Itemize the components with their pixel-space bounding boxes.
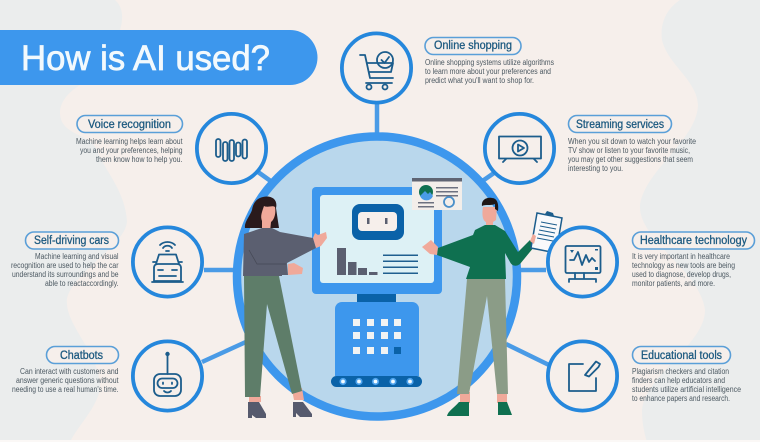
- description: interesting to you.: [568, 164, 623, 173]
- robot base: [331, 376, 422, 387]
- title banner: [0, 30, 318, 85]
- icon: heart-rate monitor: [548, 227, 617, 297]
- item: Self-driving cars: [11, 227, 202, 297]
- description: monitor patients, and more.: [632, 279, 715, 288]
- man face: [482, 207, 497, 228]
- description: [632, 367, 741, 403]
- man jersey: [437, 225, 534, 279]
- robot body: [335, 302, 419, 376]
- description: [632, 252, 735, 288]
- clipboard: [531, 211, 562, 253]
- woman hands: [288, 232, 327, 275]
- floating dashboard card: [412, 178, 462, 210]
- heading: Healthcare technology: [640, 235, 747, 247]
- description: you and your preferences, helping: [80, 146, 182, 155]
- description: Online shopping systems utilize algorithms: [425, 58, 554, 67]
- heading: [568, 116, 672, 132]
- man hand: [422, 240, 438, 255]
- icon: note with pencil: [548, 341, 617, 411]
- description: [76, 137, 183, 164]
- monitor text lines: [383, 254, 418, 274]
- woman hair: [245, 197, 279, 228]
- robot neck: [357, 292, 396, 304]
- icon: shopping cart: [342, 33, 411, 103]
- woman face and neck: [261, 206, 275, 232]
- man shoes: [447, 402, 512, 416]
- description: [568, 137, 696, 173]
- icon: robot head: [133, 341, 202, 411]
- description: Plagiarism checkers and citation: [632, 367, 729, 376]
- heading: [46, 346, 118, 364]
- woman figure: [243, 197, 327, 418]
- heading: [632, 346, 730, 364]
- description: understand its surroundings and be: [12, 270, 118, 279]
- description: needing to use a real human's time.: [12, 385, 118, 394]
- woman sweater: [243, 228, 316, 276]
- title banner: How is AI used?: [21, 39, 270, 78]
- heading: Voice recognition: [88, 119, 171, 131]
- description: to learn more about your preferences and: [425, 67, 551, 76]
- description: recognition are used to help the car: [11, 261, 119, 270]
- woman boots: [248, 402, 312, 418]
- man legs: [457, 279, 508, 403]
- central circle: [237, 136, 517, 416]
- description: [425, 58, 554, 85]
- item: Voice recognition: [76, 114, 266, 183]
- description: Machine learning helps learn about: [76, 137, 183, 146]
- robot computer: [312, 187, 442, 387]
- item: Chatbots: [12, 341, 202, 411]
- heading: [77, 116, 182, 132]
- item: Streaming services: [485, 114, 696, 183]
- heading: Chatbots: [60, 350, 103, 362]
- monitor bar chart: [337, 248, 378, 275]
- man hand on clipboard: [530, 234, 536, 244]
- description: answer generic questions without: [16, 376, 119, 385]
- robot face: [352, 204, 404, 240]
- description: Machine learning and visual: [35, 252, 119, 261]
- description: finders can help educators and: [632, 376, 725, 385]
- description: them know how to help you.: [96, 155, 182, 164]
- description: predict what you'll want to shop for.: [425, 76, 534, 85]
- icon: TV with play button: [485, 114, 554, 183]
- description: Can interact with customers and: [20, 367, 118, 376]
- woman sleeve fold: [249, 250, 286, 264]
- heading: Educational tools: [641, 350, 722, 362]
- description: you may get other suggestions that seem: [568, 155, 693, 164]
- monitor: [312, 187, 442, 294]
- heading: Streaming services: [576, 119, 664, 131]
- item: Healthcare technology: [548, 227, 754, 297]
- description: technology as new tools are being: [632, 261, 735, 270]
- heading: Online shopping: [434, 40, 512, 52]
- item: Online shopping: [342, 33, 554, 103]
- description: students utilize artificial intelligence: [632, 385, 741, 394]
- heading: Self-driving cars: [34, 235, 109, 247]
- icon: sound wave: [197, 114, 266, 183]
- description: [12, 367, 119, 394]
- description: When you sit down to watch your favorite: [568, 137, 696, 146]
- description: able to reactaccordingly.: [45, 279, 118, 288]
- item: Educational tools: [548, 341, 741, 411]
- icon: connected car: [133, 227, 202, 297]
- man hair: [482, 198, 498, 211]
- description: TV show or listen to your favorite music,: [568, 146, 690, 155]
- man figure: [422, 198, 562, 416]
- description: to enhance papers and research.: [632, 394, 730, 403]
- woman legs: [244, 276, 304, 402]
- description: It is very important in healthcare: [632, 252, 730, 261]
- heading: [425, 38, 521, 54]
- heading: [632, 232, 754, 249]
- description: used to diagnose, develop drugs,: [632, 270, 731, 279]
- connector lines: [202, 104, 549, 365]
- heading: [26, 232, 118, 249]
- description: [11, 252, 119, 288]
